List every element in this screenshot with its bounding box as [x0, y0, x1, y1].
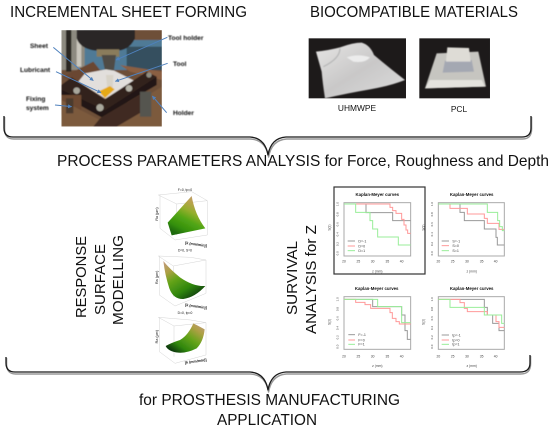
chart: Kaplan-Meyer tp: S(z) [421, 319, 425, 325]
vertical heading: response surface modelling: SURFACE [92, 244, 109, 315]
chart: Kaplan-Meyer F: S(z) [328, 319, 332, 325]
chart: Kaplan-Meyer tp: tp=-1 [452, 333, 461, 337]
surface plot 3: D=0, tp=0 [178, 311, 192, 315]
chart: Kaplan-Meyer D: D=1 [358, 249, 365, 253]
vertical heading: response surface modelling: RESPONSE [73, 236, 90, 318]
chart: Kaplan-Meyer S: 1.0 [430, 202, 434, 206]
chart: Kaplan-Meyer D: 0.0 [336, 251, 340, 255]
chart: Kaplan-Meyer tp: 0.2 [430, 335, 434, 339]
heading: prosthesis manufacturing application [139, 392, 400, 429]
chart: Kaplan-Meyer tp: 40 [494, 354, 498, 358]
surface plot 2: [k (mm/min)] [185, 303, 208, 310]
surface plot 1: [k (mm/min)] [185, 241, 208, 248]
chart: Kaplan-Meyer D: 25 [356, 260, 360, 264]
chart: Kaplan-Meyer D: z (mm) [372, 269, 383, 273]
chart: Kaplan-Meyer F: 35 [385, 354, 389, 358]
chart: Kaplan-Meyer D: 0.2 [336, 242, 340, 246]
chart: Kaplan-Meyer tp: 20 [436, 354, 440, 358]
chart: Kaplan-Meyer S [421, 192, 504, 273]
chart: Kaplan-Meyer F: F=0 [358, 338, 365, 342]
chart: Kaplan-Meyer tp: tp=1 [452, 343, 460, 347]
chart: Kaplan-Meyer D: D=0 [358, 244, 365, 248]
chart: Kaplan-Meyer tp: 0.6 [430, 316, 434, 320]
chart: Kaplan-Meyer F: 30 [371, 354, 375, 358]
photo: UHMWPE sample [309, 38, 406, 98]
chart: Kaplan-Meyer tp: 0.0 [430, 344, 434, 349]
labels: machine parts [20, 35, 204, 117]
chart: Kaplan-Meyer F: z (mm) [372, 364, 383, 368]
chart: Kaplan-Meyer tp: 1.0 [430, 297, 434, 301]
chart: Kaplan-Meyer tp: tp=0 [452, 338, 460, 342]
surface plot 2: Ra (μm) [155, 271, 159, 284]
label: UHMWPE: UHMWPE [338, 103, 376, 113]
heading: prosthesis manufacturing application: for PROSTHESIS MANUFACTURING [139, 392, 400, 409]
chart: Kaplan-Meyer F: 0.8 [336, 307, 340, 311]
chart: Kaplan-Meyer F: Kaplan-Meyer curves [355, 286, 399, 291]
chart: Kaplan-Meyer F: 0.4 [336, 326, 340, 330]
chart: Kaplan-Meyer F: 40 [400, 354, 404, 358]
chart: Kaplan-Meyer D: 0.8 [336, 212, 340, 216]
surface plot 1: Ra (μm) [155, 207, 159, 221]
highlight box around first survival chart [334, 187, 425, 274]
chart: Kaplan-Meyer S: 0.6 [430, 222, 434, 226]
labels: machine parts: Sheet [30, 43, 49, 50]
chart: Kaplan-Meyer tp: 0.4 [430, 326, 434, 330]
chart: Kaplan-Meyer F: 0.6 [336, 316, 340, 320]
surface plot 3 [155, 311, 208, 365]
surface plot 3: [k (mm/min)] [185, 358, 208, 365]
chart: Kaplan-Meyer S: S=0 [452, 244, 459, 248]
arrows [53, 37, 168, 113]
chart: Kaplan-Meyer D: 0.4 [336, 232, 340, 236]
chart: Kaplan-Meyer D: 30 [371, 260, 375, 264]
chart: Kaplan-Meyer tp: 25 [451, 354, 455, 358]
label: PCL: PCL [451, 104, 467, 114]
chart: Kaplan-Meyer S: 20 [436, 260, 440, 264]
surface plot 1: F=0, tp=0 [178, 188, 192, 192]
chart: Kaplan-Meyer tp: Kaplan-Meyer curves [450, 286, 494, 291]
chart: Kaplan-Meyer S: 35 [480, 260, 484, 264]
labels: machine parts: system [26, 105, 49, 112]
chart: Kaplan-Meyer S: S=-1 [452, 239, 460, 243]
surface plot 3: Ra (μm) [155, 330, 159, 343]
surface plot 1 [155, 188, 208, 248]
chart: Kaplan-Meyer D: 35 [385, 260, 389, 264]
chart: Kaplan-Meyer F [328, 286, 411, 368]
chart: Kaplan-Meyer F: 25 [356, 354, 360, 358]
chart: response surface plots [155, 188, 208, 365]
chart: Kaplan-Meyer S: 0.2 [430, 242, 434, 246]
labels: machine parts: Fixing [26, 96, 45, 103]
chart: Kaplan-Meyer S: 0.8 [430, 212, 434, 216]
chart: Kaplan-Meyer D [328, 192, 411, 273]
heading: incremental sheet forming: INCREMENTAL SHEET FORMING [10, 4, 247, 21]
chart: Kaplan-Meyer F: F=-1 [358, 333, 366, 337]
vertical heading: survival analysis for Z: SURVIVAL [284, 241, 301, 315]
labels: machine parts: Holder [173, 110, 194, 117]
chart: Kaplan-Meyer S: 25 [451, 260, 455, 264]
chart: Kaplan-Meyer D: D=-1 [358, 239, 366, 243]
photo: PCL sample [419, 38, 490, 98]
heading: process parameters analysis: PROCESS PARAMETERS ANALYSIS for Force, Roughness and Depth [57, 153, 549, 170]
vertical heading: survival analysis for Z [284, 225, 320, 334]
surface plot 2 [155, 249, 208, 310]
chart: Kaplan-Meyer D: Kaplan-Meyer curves [356, 192, 400, 197]
chart: Kaplan-Meyer S: Kaplan-Meyer curves [450, 192, 494, 197]
chart: Kaplan-Meyer tp: 35 [480, 354, 484, 358]
chart: Kaplan-Meyer F: 0.2 [336, 335, 340, 339]
vertical heading: response surface modelling [73, 235, 127, 325]
chart: Kaplan-Meyer tp [421, 286, 504, 368]
chart: Kaplan-Meyer F: 20 [342, 354, 346, 358]
chart: Kaplan-Meyer D: 20 [342, 260, 346, 264]
chart: Kaplan-Meyer D: 40 [400, 260, 404, 264]
vertical heading: survival analysis for Z: ANALYSIS for Z [303, 225, 320, 334]
chart: Kaplan-Meyer S: 0.4 [430, 232, 434, 236]
heading: biocompatible materials: BIOCOMPATIBLE MATERIALS [310, 4, 518, 21]
chart: Kaplan-Meyer D: S(z) [328, 225, 332, 231]
chart: Kaplan-Meyer S: 40 [494, 260, 498, 264]
labels: machine parts: Lubricant [20, 67, 51, 74]
vertical heading: response surface modelling: MODELLING [110, 235, 127, 325]
photo: forming machine [53, 30, 168, 127]
labels: machine parts: Tool holder [168, 35, 204, 42]
top brace [4, 116, 532, 157]
chart: Kaplan-Meyer S: z (mm) [466, 269, 477, 273]
chart: Kaplan-Meyer S: S=1 [452, 249, 459, 253]
chart: Kaplan-Meyer F: F=1 [358, 343, 365, 347]
chart: Kaplan-Meyer tp: z (mm) [466, 364, 477, 368]
chart: Kaplan-Meyer S: 30 [465, 260, 469, 264]
chart: Kaplan-Meyer tp: 30 [465, 354, 469, 358]
heading: prosthesis manufacturing application: APPLICATION [217, 412, 317, 429]
chart: Kaplan-Meyer F: 1.0 [336, 297, 340, 301]
chart: Kaplan-Meyer D: 0.6 [336, 222, 340, 226]
chart: Kaplan-Meyer D: 1.0 [336, 202, 340, 206]
bottom brace [6, 355, 531, 392]
chart: Kaplan-Meyer S: 0.0 [430, 251, 434, 255]
chart: Kaplan-Meyer S: S(z) [421, 225, 425, 231]
chart: Kaplan-Meyer tp: 0.8 [430, 307, 434, 311]
labels: machine parts: Tool [173, 61, 187, 68]
chart: Kaplan-Meyer F: 0.0 [336, 344, 340, 349]
surface plot 2: D=0, S=0 [178, 249, 192, 253]
